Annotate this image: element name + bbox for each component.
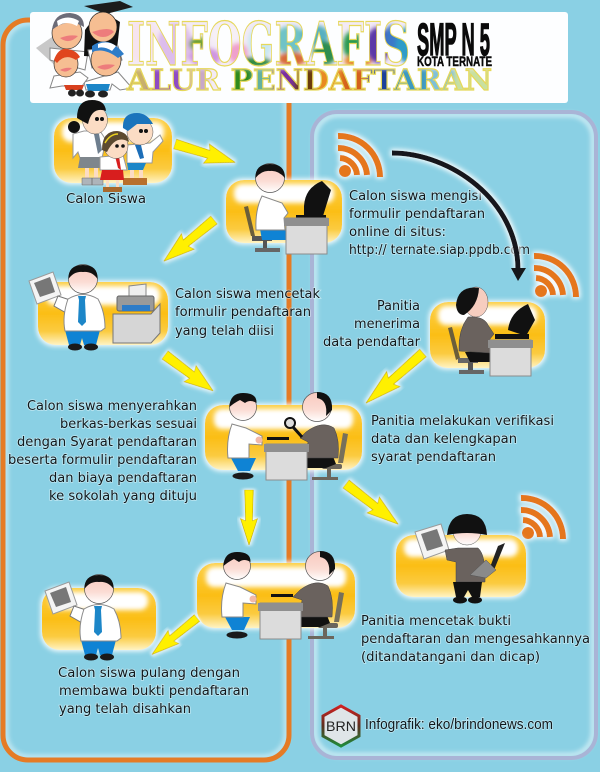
text: verification step <box>371 413 554 465</box>
girl <box>73 131 106 158</box>
text: committee receives data: Panitia <box>377 298 420 314</box>
label: Calon Siswa: Calon Siswa <box>66 191 146 207</box>
text: verification step: data dan kelengkapan <box>371 431 517 447</box>
banner title: INFOGRAFIS: INFOGRAFIS <box>127 10 410 80</box>
text: submission step: beserta formulir pendaftaran <box>8 452 197 468</box>
text: going home step: membawa bukti pendaftaran <box>59 683 249 699</box>
text: online form step <box>349 188 530 258</box>
text: committee prints proof: pendaftaran dan mengesahkannya <box>361 631 590 647</box>
text: submission step: ke sokolah yang dituju <box>49 488 197 504</box>
icon: wifi signal at laptop <box>521 498 563 539</box>
logo: BRN hexagon: BRN <box>326 718 356 734</box>
text: submission step <box>8 398 197 504</box>
text: committee prints proof: (ditandatangani dan dicap) <box>361 649 540 665</box>
little girl <box>100 155 127 170</box>
banner cartoon students <box>36 1 133 98</box>
text: online form step: http:// ternate.siap.ppdb.com <box>349 242 530 258</box>
arrow: print to submission <box>159 347 219 399</box>
text: print form step: Calon siswa mencetak <box>175 286 320 302</box>
text: print form step: formulir pendaftaran <box>175 304 311 320</box>
logo: BRN hexagon <box>323 706 359 746</box>
arrow: calon siswa to computer <box>172 134 238 172</box>
banner: SMP N 5 <box>417 14 490 65</box>
banner subtitle: ALUR PENDAFTARAN: ALUR PENDAFTARAN <box>126 63 492 97</box>
text: submission step: berkas-berkas sesuai <box>60 416 197 432</box>
text: going home step: Calon siswa pulang dengan <box>58 665 240 681</box>
text: committee prints proof: Panitia mencetak bukti <box>361 613 511 629</box>
text: committee receives data: menerima <box>354 316 420 332</box>
arrow: computer to print <box>157 212 220 269</box>
arrow: verification down to handover <box>240 490 258 545</box>
magnifier <box>285 418 302 437</box>
scene: calon siswa group <box>54 100 172 192</box>
icon: wifi signal at computer <box>338 136 380 177</box>
text: verification step: Panitia melakukan verifikasi <box>371 413 554 429</box>
text: submission step: dan biaya pendaftaran <box>49 470 197 486</box>
text: committee receives data <box>323 298 420 350</box>
panel: left student column frame <box>3 20 289 760</box>
boy <box>127 135 163 163</box>
icon: wifi signal at committee computer <box>534 256 576 297</box>
text: print form step: yang telah diisi <box>175 323 274 339</box>
panel: right committee column frame <box>312 112 596 758</box>
text: submission step: Calon siswa menyerahkan <box>27 398 197 414</box>
banner city name: KOTA TERNATE <box>417 53 492 69</box>
scene: student printing form <box>29 264 168 350</box>
text: online form step: formulir pendaftaran <box>349 206 485 222</box>
printer <box>113 284 160 343</box>
text: online form step: online di situs: <box>349 224 446 240</box>
text: going home step: yang telah disahkan <box>59 701 191 717</box>
arrow: black curved data arrow <box>392 153 526 281</box>
arrow: committee to verification <box>359 345 430 411</box>
arrow: verification to committee print <box>340 476 404 532</box>
text: online form step: Calon siswa mengisi <box>349 188 482 204</box>
text: committee prints proof <box>361 613 590 665</box>
banner <box>30 1 568 103</box>
text: print form step <box>175 286 320 339</box>
laptop <box>470 543 505 578</box>
text: submission step: dengan Syarat pendaftaran <box>17 434 197 450</box>
text: verification step: syarat pendaftaran <box>371 449 496 465</box>
scene: student at computer <box>226 164 342 254</box>
scene: handover at desk <box>197 551 355 639</box>
text: going home step <box>58 665 249 717</box>
arrow: handover to going home <box>147 611 202 661</box>
text: committee receives data: data pendaftar <box>323 334 420 350</box>
scene: committee receiving data <box>430 287 545 376</box>
scene: verification desk <box>205 392 362 480</box>
credit line: Infografik: eko/brindonews.com <box>365 716 553 733</box>
scene: committee printing proof on laptop <box>396 514 526 604</box>
scene: student going home with proof <box>42 574 156 660</box>
